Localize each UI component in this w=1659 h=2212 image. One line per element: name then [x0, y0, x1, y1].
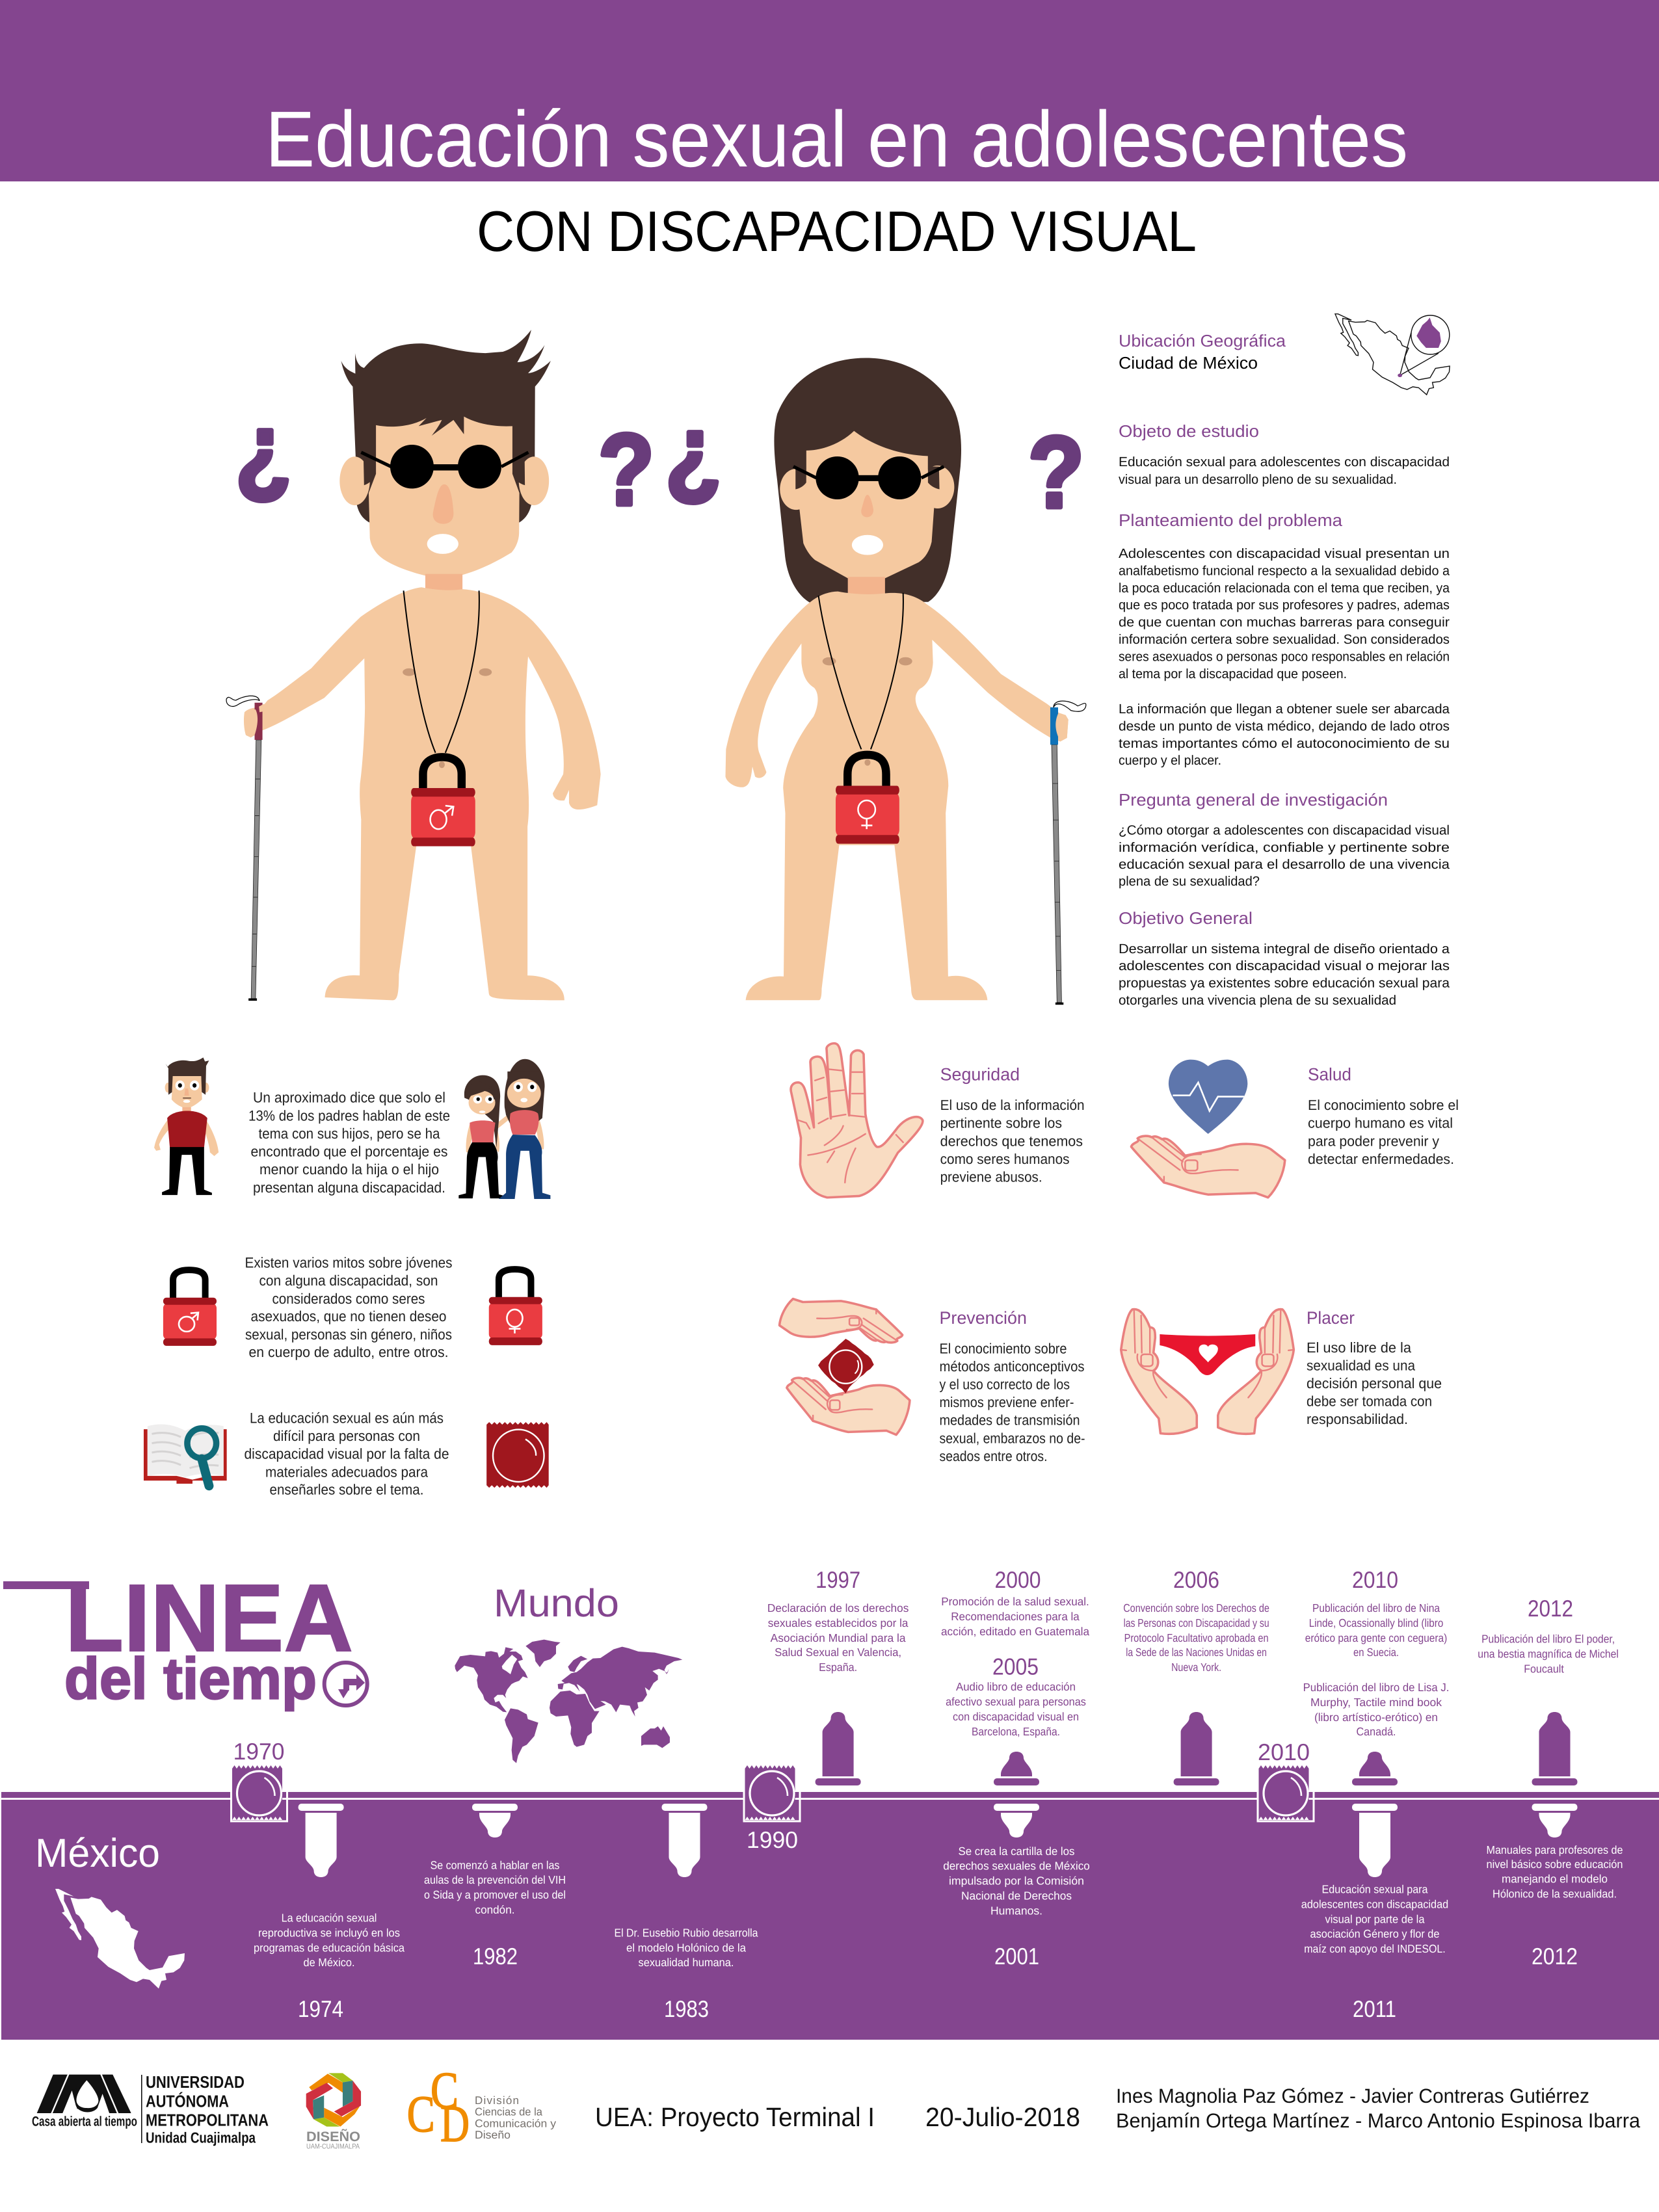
- México events: aulas de la prevención del VIH: [424, 1873, 566, 1886]
- text: salud: para poder prevenir y: [1308, 1133, 1439, 1149]
- México events: La educación sexual: [282, 1912, 377, 1925]
- text: materiales: discapacidad visual por la falta de: [245, 1446, 449, 1462]
- world events: con discapacidad visual en: [953, 1710, 1079, 1723]
- world events: Declaración de los derechos: [767, 1601, 909, 1614]
- text: prevención: sexual, embarazos no de-: [939, 1430, 1085, 1447]
- logo: UAM: METROPOLITANA: [146, 2110, 269, 2129]
- timeline band: [1, 1792, 1659, 2040]
- world events: Barcelona, España.: [972, 1725, 1060, 1738]
- timeline heading: [3, 1565, 367, 1712]
- text: objetivo: [1119, 941, 1450, 1008]
- México events: reproductiva se incluyó en los: [258, 1926, 400, 1939]
- question marks: ¿: [235, 393, 291, 506]
- world events: en Suecia.: [1353, 1646, 1399, 1659]
- world events: España.: [819, 1661, 857, 1674]
- text: authors: Benjamín Ortega Martínez - Marco Antonio Espinosa Ibarra: [1116, 2109, 1641, 2132]
- icon: male lock: [163, 1270, 217, 1346]
- text: prevención: y el uso correcto de los: [939, 1376, 1070, 1393]
- México events: sexualidad humana.: [639, 1956, 734, 1969]
- México events: Se comenzó a hablar en las: [431, 1859, 560, 1872]
- world events: Publicación del libro El poder,: [1481, 1633, 1615, 1646]
- heading: objetivo: Objetivo General: [1119, 908, 1253, 928]
- world events: Nueva York.: [1171, 1661, 1221, 1674]
- text: objetivo: Desarrollar un sistema integral de diseño orientado a: [1119, 941, 1450, 956]
- world events: Asociación Mundial para la: [771, 1631, 906, 1644]
- México events: programas de educación básica: [254, 1941, 405, 1954]
- México events: 1974: [298, 1995, 343, 2022]
- figure: man with cane and lock: [226, 330, 601, 1001]
- subtitle: CON DISCAPACIDAD VISUAL: [477, 199, 1197, 263]
- heading: prevención: Prevención: [939, 1308, 1027, 1328]
- logo: UAM: [32, 2072, 269, 2146]
- text: pregunta: información verídica, confiable y pertinente sobre: [1119, 840, 1450, 855]
- world events: 2000: [995, 1566, 1041, 1593]
- header band: [0, 0, 1659, 181]
- México events: 1983: [664, 1995, 709, 2022]
- México events: 2011: [1353, 1995, 1396, 2022]
- world events: Linde, Ocassionally blind (libro: [1309, 1616, 1443, 1629]
- México events: Nacional de Derechos: [961, 1889, 1072, 1903]
- heading: mundo: Mundo: [494, 1581, 619, 1625]
- text: materiales: difícil para personas con: [273, 1428, 420, 1444]
- text: prevención: métodos anticonceptivos: [939, 1358, 1085, 1375]
- world events: la Sede de las Naciones Unidas en: [1126, 1646, 1267, 1659]
- icon: mother and daughter: [458, 1059, 550, 1199]
- text: planteamiento: información certera sobre sexualidad. Son considerados: [1119, 632, 1450, 647]
- text: seguridad: pertinente sobre los: [940, 1115, 1062, 1131]
- text: planteamiento: temas importantes cómo el autoconocimiento de su: [1119, 736, 1450, 751]
- text: planteamiento: [1119, 546, 1450, 768]
- México events: 2012: [1532, 1943, 1578, 1969]
- text: objetivo: propuestas ya existentes sobre educación sexual para: [1119, 976, 1450, 991]
- world events: Publicación del libro de Nina: [1312, 1601, 1440, 1614]
- panel: benefits: [780, 1044, 1459, 1464]
- world events: Convención sobre los Derechos de: [1123, 1601, 1269, 1614]
- condoms above line: [816, 1712, 1578, 1785]
- world events: una bestia magnífica de Michel: [1478, 1648, 1619, 1661]
- icon: open hand: [791, 1044, 923, 1198]
- text: placer: sexualidad es una: [1307, 1358, 1416, 1374]
- logo: UAM: Casa abierta al tiempo: [32, 2114, 137, 2129]
- heading: seguridad: Seguridad: [940, 1065, 1020, 1085]
- text: mitos: con alguna discapacidad, son: [259, 1272, 438, 1289]
- text: prevención: medades de transmisión: [939, 1412, 1080, 1429]
- icon: condom package: [486, 1422, 549, 1488]
- world events: 2010: [1352, 1566, 1398, 1593]
- logo: CCD: División: [475, 2094, 519, 2107]
- question marks: ?: [598, 414, 654, 527]
- logo: CCD: D: [440, 2096, 470, 2153]
- México events: 2001: [994, 1943, 1039, 1969]
- text: placer: debe ser tomada con: [1307, 1393, 1432, 1410]
- México events: Humanos.: [990, 1904, 1042, 1917]
- México events: El Dr. Eusebio Rubio desarrolla: [614, 1926, 758, 1939]
- text: placer: decisión personal que: [1307, 1375, 1442, 1391]
- text: prevención: seados entre otros.: [939, 1448, 1047, 1464]
- México events: de México.: [303, 1956, 355, 1969]
- text: prevención: El conocimiento sobre: [939, 1340, 1067, 1356]
- text: placer: responsabilidad.: [1307, 1411, 1408, 1427]
- world events: Canadá.: [1357, 1725, 1396, 1738]
- world events: 2006: [1173, 1566, 1219, 1593]
- text: mitos: Existen varios mitos sobre jóvenes: [245, 1254, 453, 1271]
- text: ciudad: Ciudad de México: [1119, 353, 1258, 373]
- México events: adolescentes con discapacidad: [1301, 1897, 1448, 1910]
- text: UEA: UEA: Proyecto Terminal I: [595, 2102, 875, 2132]
- heading: méxico: México: [35, 1831, 160, 1876]
- text: materiales: materiales adecuados para: [265, 1464, 428, 1480]
- icon: hands and underwear: [1121, 1310, 1294, 1434]
- text: objetivo: otorgarles una vivencia plena de su sexualidad: [1119, 993, 1396, 1008]
- text: authors: [1116, 2085, 1641, 2132]
- México events: o Sida y a promover el uso del: [424, 1888, 566, 1901]
- text: objeto de estudio: Educación sexual para adolescentes con discapacidad: [1119, 454, 1450, 469]
- logo: CCD: Ciencias de la: [475, 2105, 543, 2118]
- world events: Protocolo Facultativo aprobada en: [1124, 1631, 1269, 1644]
- condoms below line: [299, 1804, 1578, 1877]
- México events: condón.: [475, 1903, 515, 1916]
- world events: Recomendaciones para la: [951, 1610, 1080, 1623]
- world events: 1997: [816, 1566, 860, 1593]
- world events: Audio libro de educación: [956, 1680, 1076, 1693]
- text: pregunta: plena de su sexualidad?: [1119, 874, 1260, 889]
- icon: package 1990: [744, 1765, 800, 1821]
- México events: 1990: [747, 1826, 798, 1853]
- world events: (libro artístico-erótico) en: [1314, 1711, 1438, 1724]
- icon: book and magnifier: [144, 1425, 227, 1486]
- world events: 2005: [992, 1653, 1039, 1679]
- text: padres: Un aproximado dice que solo el: [253, 1090, 445, 1106]
- text: salud: [1308, 1097, 1459, 1167]
- México events: derechos sexuales de México: [943, 1860, 1090, 1873]
- icon: package 1970: [232, 1765, 287, 1821]
- world events: 2010: [1258, 1739, 1310, 1765]
- icon: female lock: [489, 1269, 542, 1345]
- logo: Diseño: UAM-CUAJIMALPA: [306, 2142, 360, 2150]
- world events: sexuales establecidos por la: [768, 1616, 909, 1629]
- text: padres: menor cuando la hija o el hijo: [259, 1161, 439, 1178]
- México events: Manuales para profesores de: [1487, 1843, 1623, 1856]
- text: placer: El uso libre de la: [1307, 1339, 1412, 1356]
- text: seguridad: El uso de la información: [940, 1097, 1085, 1113]
- icon: world map: [455, 1640, 682, 1763]
- heading: placer: Placer: [1307, 1308, 1355, 1328]
- text: date: 20-Julio-2018: [925, 2102, 1080, 2132]
- logo: UAM: Unidad Cuajimalpa: [146, 2129, 256, 2146]
- logo: CCD: Diseño: [475, 2129, 511, 2141]
- world events: acción, editado en Guatemala: [941, 1625, 1089, 1638]
- text: seguridad: derechos que tenemos: [940, 1133, 1083, 1149]
- México events: Se crea la cartilla de los: [959, 1845, 1075, 1858]
- text: planteamiento: de que cuentan con muchas barreras para conseguir: [1119, 615, 1450, 630]
- logo: CCD: [407, 2062, 557, 2153]
- México events: [254, 1826, 1623, 2022]
- text: objetivo: adolescentes con discapacidad visual o mejorar las: [1119, 958, 1450, 973]
- icon: package 2010: [1258, 1765, 1314, 1821]
- icon: heart over hand: [1131, 1060, 1285, 1198]
- timeline heading: LINEA: [65, 1565, 353, 1672]
- text: planteamiento: seres asexuados o personas poco responsables en relación: [1119, 649, 1450, 664]
- question marks: [235, 393, 1084, 529]
- text: planteamiento: la poca educación relacionada con el tema que reciben, ya: [1119, 581, 1450, 596]
- text: mitos: sexual, personas sin género, niños: [245, 1326, 452, 1343]
- world events: Promoción de la salud sexual.: [941, 1595, 1089, 1608]
- world events: erótico para gente con ceguera): [1305, 1631, 1447, 1644]
- world events: Publicación del libro de Lisa J.: [1303, 1681, 1449, 1694]
- panel: project information: [1119, 314, 1450, 1008]
- text: salud: detectar enfermedades.: [1308, 1151, 1454, 1167]
- text: planteamiento: cuerpo y el placer.: [1119, 753, 1221, 768]
- México events: maíz con apoyo del INDESOL.: [1304, 1942, 1446, 1955]
- México events: manejando el modelo: [1502, 1873, 1608, 1886]
- text: seguridad: [940, 1097, 1085, 1185]
- México events: visual por parte de la: [1325, 1912, 1425, 1925]
- text: planteamiento: La información que llegan a obtener suele ser abarcada: [1119, 702, 1450, 717]
- text: padres: 13% de los padres hablan de este: [248, 1107, 450, 1124]
- heading: pregunta: Pregunta general de investigación: [1119, 790, 1388, 810]
- world events: 2012: [1528, 1595, 1573, 1622]
- title: Educación sexual en adolescentes: [265, 95, 1408, 183]
- heading: ubicación: Ubicación Geográfica: [1119, 331, 1286, 350]
- world events: afectivo sexual para personas: [946, 1695, 1086, 1708]
- timeline heading: del tiemp: [64, 1647, 317, 1712]
- text: mitos: [245, 1254, 453, 1360]
- text: salud: cuerpo humano es vital: [1308, 1115, 1453, 1131]
- text: planteamiento: desde un punto de vista médico, dejando de lado otros: [1119, 718, 1450, 733]
- México events: Educación sexual para: [1321, 1883, 1428, 1896]
- text: planteamiento: que es poco tratada por sus profesores y padres, ademas: [1119, 598, 1450, 612]
- México events: Hólonico de la sexualidad.: [1493, 1888, 1617, 1901]
- text: pregunta: educación sexual para el desarrollo de una vivencia: [1119, 857, 1450, 872]
- panel: facts with icons: [144, 1057, 550, 1498]
- text: padres: [248, 1090, 450, 1196]
- world events: Salud Sexual en Valencia,: [775, 1646, 901, 1659]
- logo: UAM: AUTÓNOMA: [146, 2092, 229, 2111]
- icon: map of Mexico: [55, 1889, 185, 1988]
- text: mitos: considerados como seres: [272, 1291, 425, 1307]
- logo: CCD: Comunicación y: [475, 2118, 557, 2130]
- text: prevención: mismos previene enfer-: [939, 1394, 1074, 1410]
- text: pregunta: ¿Cómo otorgar a adolescentes con discapacidad visual: [1119, 823, 1450, 837]
- text: objeto de estudio: [1119, 454, 1450, 487]
- heading: planteamiento: Planteamiento del problema: [1119, 510, 1343, 530]
- text: mitos: en cuerpo de adulto, entre otros.: [248, 1344, 449, 1360]
- figure: woman with cane and lock: [725, 358, 1086, 1005]
- text: mitos: asexuados, que no tienen deseo: [251, 1308, 446, 1324]
- logo: CCD: C: [431, 2062, 458, 2120]
- México events: nivel básico sobre educación: [1487, 1858, 1623, 1871]
- logo: CCD: C: [407, 2086, 435, 2143]
- México events: 1982: [473, 1943, 518, 1969]
- question marks: ?: [1028, 416, 1084, 529]
- heading: salud: Salud: [1308, 1065, 1351, 1085]
- logo: Diseño: DISEÑO: [306, 2129, 360, 2144]
- icon: map of Mexico with zoom: [1335, 314, 1450, 395]
- text: prevención: [939, 1340, 1085, 1464]
- icon: boy: [154, 1057, 219, 1195]
- question marks: ¿: [665, 395, 721, 508]
- text: padres: encontrado que el porcentaje es: [251, 1143, 447, 1160]
- text: authors: Ines Magnolia Paz Gómez - Javier Contreras Gutiérrez: [1116, 2085, 1589, 2107]
- México events: impulsado por la Comisión: [949, 1875, 1084, 1888]
- logo: Diseño: [306, 2073, 361, 2150]
- world events: 1970: [233, 1738, 285, 1765]
- text: materiales: [245, 1410, 449, 1498]
- world events: [233, 1566, 1619, 1765]
- text: materiales: enseñarles sobre el tema.: [269, 1482, 424, 1498]
- text: seguridad: previene abusos.: [940, 1168, 1042, 1185]
- text: pregunta: [1119, 823, 1450, 889]
- world events: las Personas con Discapacidad y su: [1124, 1616, 1269, 1629]
- text: planteamiento: analfabetismo funcional respecto a la sexualidad debido a: [1119, 563, 1450, 578]
- world events: Foucault: [1524, 1662, 1564, 1675]
- text: salud: El conocimiento sobre el: [1308, 1097, 1459, 1113]
- text: placer: [1307, 1339, 1442, 1427]
- heading: objeto de estudio: Objeto de estudio: [1119, 421, 1259, 441]
- México events: asociación Género y flor de: [1310, 1927, 1440, 1940]
- text: planteamiento: al tema por la discapacidad que poseen.: [1119, 666, 1347, 681]
- text: objeto de estudio: visual para un desarrollo pleno de su sexualidad.: [1119, 472, 1397, 487]
- logo: UAM: UNIVERSIDAD: [146, 2072, 245, 2092]
- text: padres: presentan alguna discapacidad.: [253, 1179, 445, 1196]
- text: seguridad: como seres humanos: [940, 1151, 1070, 1167]
- text: padres: tema con sus hijos, pero se ha: [259, 1126, 440, 1142]
- world events: Murphy, Tactile mind book: [1310, 1696, 1442, 1709]
- text: planteamiento: Adolescentes con discapacidad visual presentan un: [1119, 546, 1450, 561]
- text: materiales: La educación sexual es aún más: [250, 1410, 444, 1427]
- icon: hands protecting condom: [780, 1299, 910, 1435]
- México events: el modelo Holónico de la: [626, 1941, 746, 1954]
